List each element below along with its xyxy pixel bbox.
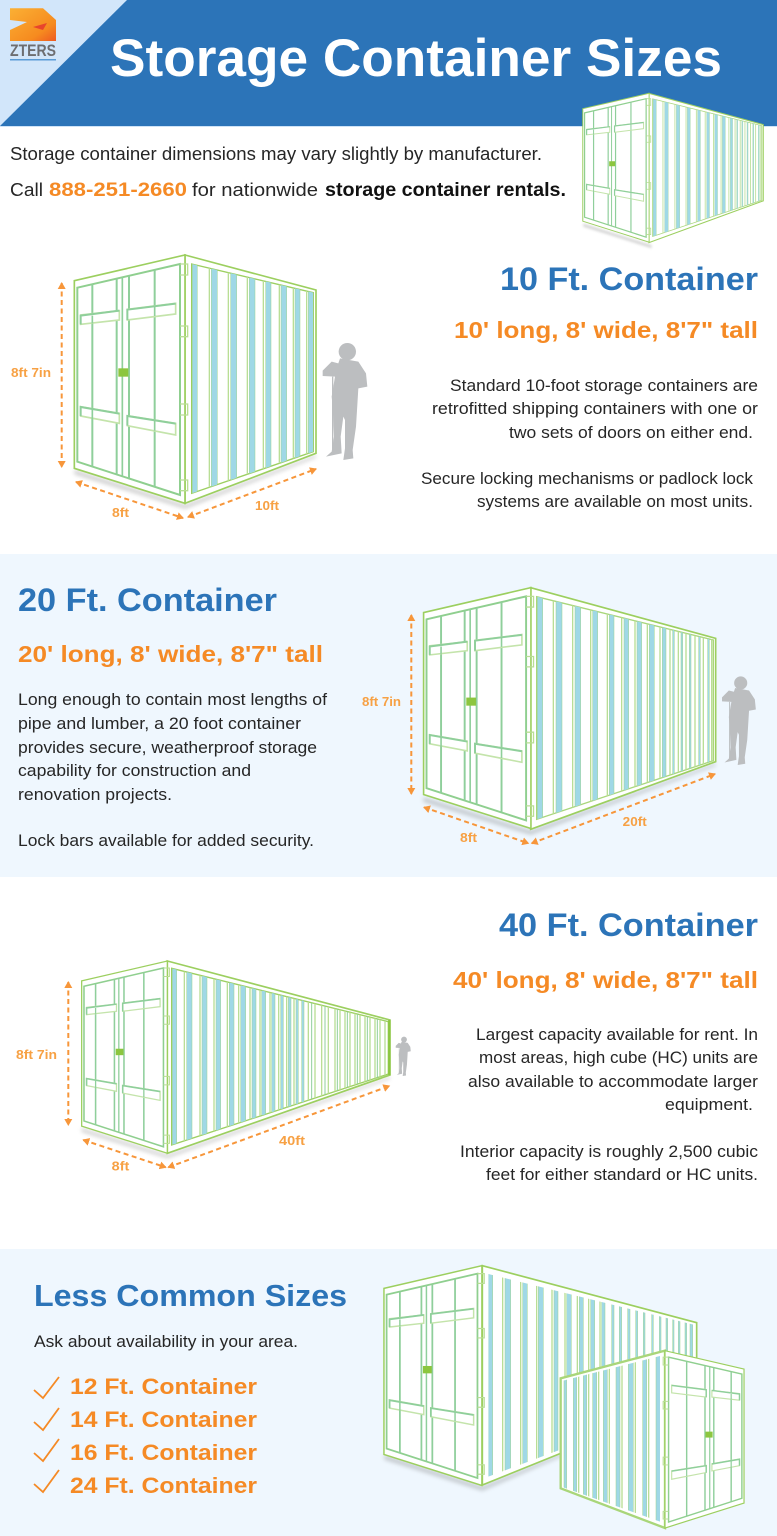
illustration: small container [560,1349,666,1530]
dimensions: 40 ft: 40' long, 8' wide, 8'7" tall [453,967,758,993]
dimension arrows: 10 ft: 8ft [112,506,130,520]
intro text [10,144,566,201]
text block: 10 ft: Standard 10-foot storage containers are [450,376,758,395]
text block: 20 ft: renovation projects. [18,785,172,804]
dimension arrows: 20 ft: 8ft 7in [362,695,401,709]
list: less common sizes [34,1374,257,1498]
illustration: large container [384,1250,697,1491]
panel: less common sizes [0,1249,777,1536]
dimension arrows: 40 ft [16,982,389,1174]
text: availability note: Ask about availability in your area. [34,1332,298,1351]
heading: 20 ft: 20 Ft. Container [18,582,277,618]
text block: 10 ft: two sets of doors on either end. [509,423,753,442]
intro text: 888-251-2660 [49,180,187,201]
intro text: for nationwide [192,180,318,200]
text block: 40 ft: equipment. [665,1095,753,1114]
dimension arrows: 40 ft: 8ft 7in [16,1048,57,1062]
list: less common sizes: 24 Ft. Container [70,1473,257,1498]
heading: 10 ft: 10 Ft. Container [500,261,758,297]
text block: 20 ft: capability for construction and [18,761,251,780]
panel: 10 ft container [11,240,758,520]
illustration: header container [583,82,763,248]
heading: 40 ft: 40 Ft. Container [499,907,758,943]
dimension arrows: 40 ft: 8ft [112,1160,130,1174]
text block: 20 ft: pipe and lumber, a 20 foot container [18,714,301,733]
small container door [663,1351,744,1530]
dimension arrows: 10 ft: 8ft 7in [11,366,51,380]
heading: less common sizes: Less Common Sizes [34,1278,347,1313]
intro text: Call [10,180,43,200]
illustration: 20 ft container [423,570,716,837]
text block: 40 ft: also available to accommodate larger [468,1072,758,1091]
text block: 20 ft [18,690,327,850]
text block: 40 ft: most areas, high cube (HC) units are [479,1048,758,1067]
panel: 40 ft container [16,907,759,1184]
intro text: storage container rentals. [325,180,566,201]
text block: 40 ft: Interior capacity is roughly 2,500 cubic [460,1142,759,1161]
text block: 10 ft: systems are available on most units. [477,492,753,511]
illustration: 10 ft container [74,240,367,509]
intro text: Storage container dimensions may vary slightly by manufacturer. [10,144,542,164]
dimension arrows: 20 ft [362,615,715,845]
panel: 20 ft container [0,554,777,877]
dimension arrows: 40 ft: 40ft [279,1134,306,1148]
dimension arrows: 10 ft [11,283,316,520]
list: less common sizes: 14 Ft. Container [70,1407,257,1432]
title: Storage Container Sizes [110,29,722,88]
person silhouette: 40 ft [396,1037,411,1076]
illustration: 40 ft container [80,960,391,1160]
text block: 20 ft: Long enough to contain most lengths of [18,690,327,709]
text block: 40 ft [460,1025,759,1184]
dimension arrows: 20 ft: 20ft [623,815,648,829]
dimension arrows: 10 ft: 10ft [255,499,280,513]
dimension arrows: 20 ft: 8ft [460,831,478,845]
text block: 40 ft: feet for either standard or HC units. [486,1165,758,1184]
text block: 10 ft: Secure locking mechanisms or padlock lock [421,469,753,488]
list: less common sizes: 12 Ft. Container [70,1374,257,1399]
logo: ZTERS [10,41,56,60]
text block: 40 ft: Largest capacity available for rent. In [476,1025,758,1044]
dimensions: 20 ft: 20' long, 8' wide, 8'7" tall [18,641,323,667]
list: less common sizes: 16 Ft. Container [70,1440,257,1465]
text block: 10 ft [421,376,758,511]
dimensions: 10 ft: 10' long, 8' wide, 8'7" tall [454,317,758,343]
text block: 10 ft: retrofitted shipping containers with one or [432,399,758,418]
header banner [0,0,777,127]
person silhouette: 20 ft [722,676,756,765]
logo [10,8,56,61]
text block: 20 ft: Lock bars available for added security. [18,831,314,850]
text block: 20 ft: provides secure, weatherproof storage [18,738,317,757]
